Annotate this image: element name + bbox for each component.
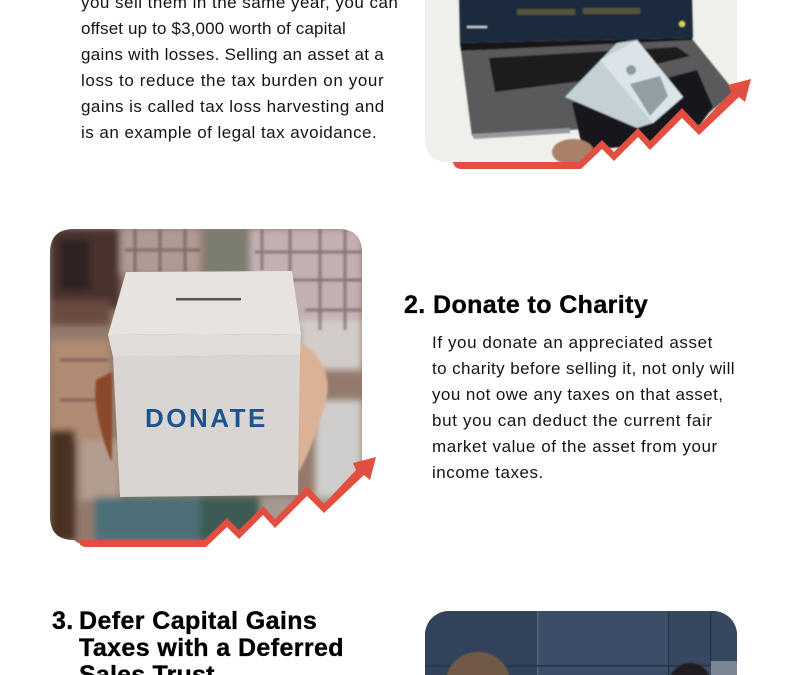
text: DONATE on box: DONATE (145, 403, 268, 433)
text block: tax loss harvesting: is an example of legal tax avoidance. (81, 123, 377, 142)
photo: donate box (50, 229, 362, 543)
photo: laptop with cash (425, 0, 737, 165)
text block: tax loss harvesting (81, 0, 398, 142)
arrow: rising red arrow top (453, 79, 751, 169)
text block: tax loss harvesting: offset up to $3,000 worth of capital (81, 19, 346, 38)
text block: tax loss harvesting: gains with losses. Selling an asset at a (81, 45, 384, 64)
text block: donate to charity: but you can deduct the current fair (432, 411, 713, 430)
text block: donate to charity: income taxes. (432, 463, 544, 482)
heading: 3. Defer Capital Gains Taxes (52, 608, 344, 675)
text block: tax loss harvesting: loss to reduce the tax burden on your (81, 71, 384, 90)
text block: donate to charity: to charity before selling it, not only will (432, 359, 735, 378)
photo: two people in office (425, 611, 737, 675)
text block: donate to charity (432, 333, 735, 482)
text block: donate to charity: market value of the asset from your (432, 437, 718, 456)
text block: donate to charity: If you donate an appreciated asset (432, 333, 713, 352)
text block: tax loss harvesting: gains is called tax loss harvesting and (81, 97, 385, 116)
text block: donate to charity: you not owe any taxes on that asset, (432, 385, 723, 404)
heading: 3. Defer Capital Gains Taxes: Taxes with a Deferred (79, 634, 344, 662)
